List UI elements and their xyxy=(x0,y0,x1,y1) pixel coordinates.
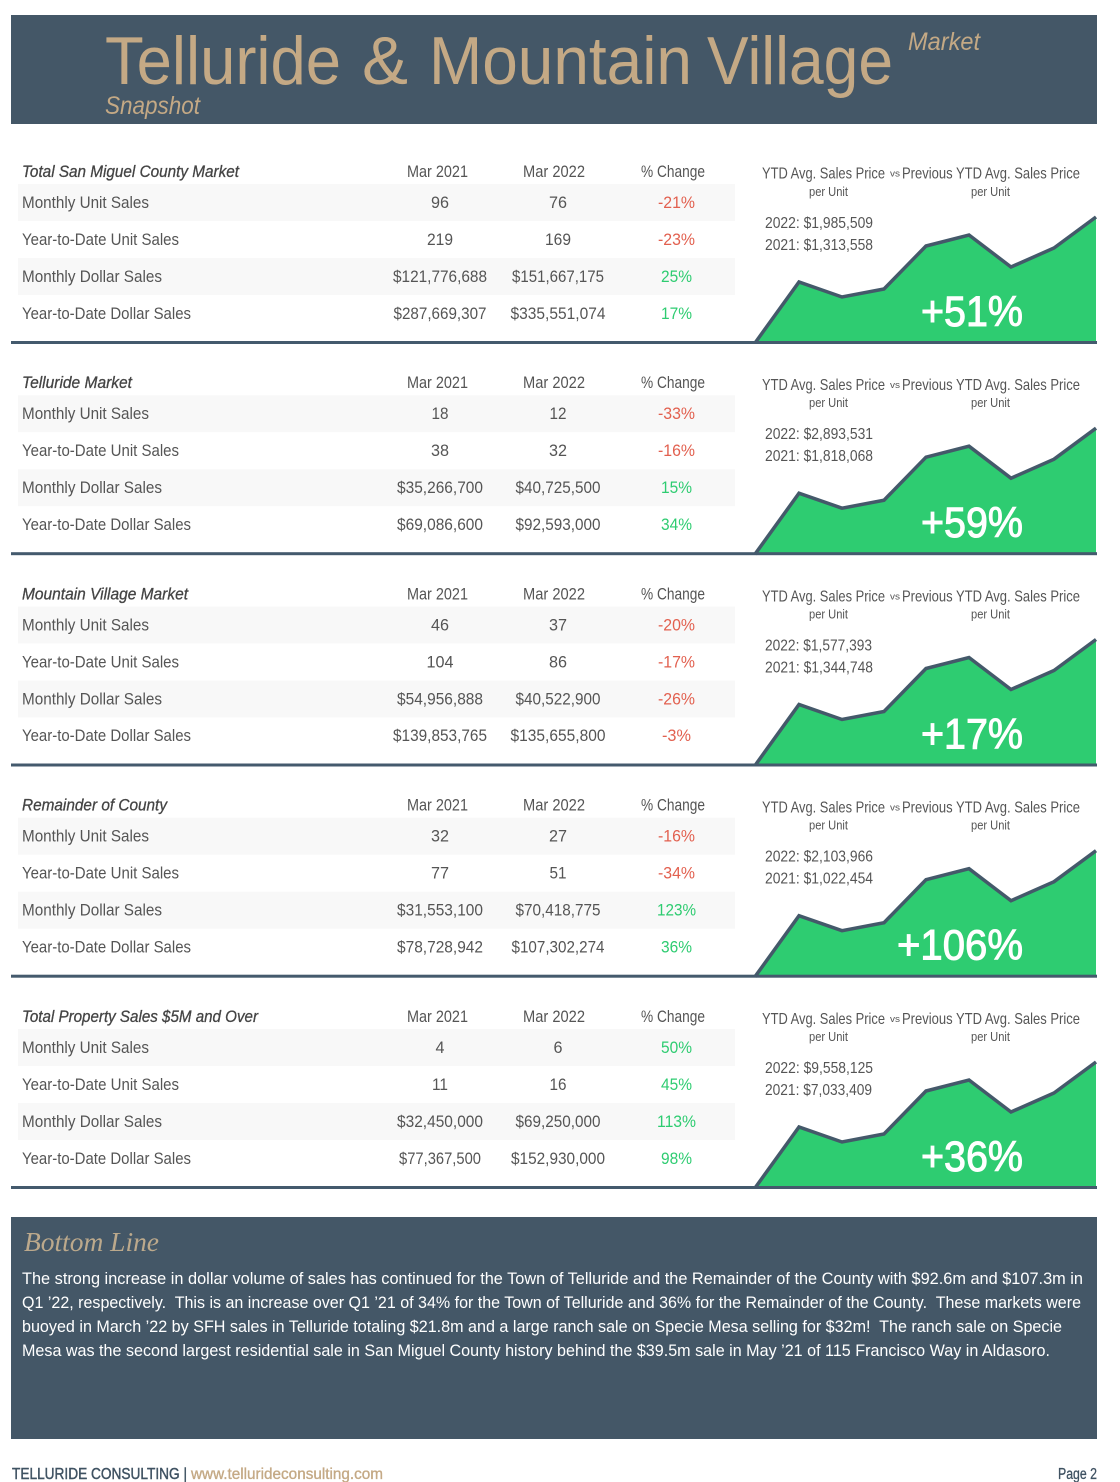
data table: Monthly Dollar Sales xyxy=(22,690,162,708)
panel: Bottom Line xyxy=(11,1217,1097,1439)
data table xyxy=(22,1007,705,1168)
data table: 16 xyxy=(550,1075,566,1094)
data table xyxy=(22,584,705,745)
data table: Mar 2022 xyxy=(523,796,585,815)
data table: Monthly Dollar Sales xyxy=(22,267,162,286)
data table: % Change xyxy=(641,373,705,392)
chart: YTD average sales price: 2022: $2,103,966 xyxy=(765,849,873,866)
data table: Year-to-Date Unit Sales xyxy=(22,652,179,672)
chart: YTD average sales price: vs xyxy=(890,592,901,602)
chart: YTD average sales price: per Unit xyxy=(809,1030,848,1044)
data table: 11 xyxy=(432,1075,448,1094)
chart: YTD average sales price: 2022: $9,558,125 xyxy=(765,1060,873,1077)
chart: YTD average sales price: per Unit xyxy=(809,185,848,199)
data table: % Change xyxy=(641,162,705,181)
data table: Mar 2022 xyxy=(523,162,585,181)
chart: YTD average sales price: +51% xyxy=(921,288,1023,336)
data table: 32 xyxy=(549,441,567,460)
panel: Total San Miguel County Market xyxy=(11,162,1097,344)
data table: % Change xyxy=(641,1007,705,1026)
data table: Year-to-Date Dollar Sales xyxy=(22,938,191,957)
body paragraph: The strong increase in dollar volume of sales has continued for the Town of Telluride and the Remainder of the County with $92.6m and $107.3m in xyxy=(22,1270,1083,1288)
chart: YTD average sales price xyxy=(11,377,1097,555)
data table: $121,776,688 xyxy=(393,267,487,286)
data table: Mar 2021 xyxy=(407,373,468,392)
data table: Mar 2021 xyxy=(407,162,468,181)
data table: 113% xyxy=(657,1112,696,1131)
data table: $92,593,000 xyxy=(516,515,600,534)
data table: 77 xyxy=(431,864,449,883)
chart: YTD average sales price: YTD Avg. Sales Price xyxy=(762,800,885,817)
data table: Monthly Unit Sales xyxy=(22,193,149,212)
data table: -17% xyxy=(658,652,695,672)
data table: -33% xyxy=(658,404,695,423)
chart: YTD average sales price: per Unit xyxy=(971,396,1010,410)
chart: YTD average sales price: per Unit xyxy=(971,608,1010,622)
data table xyxy=(22,162,705,323)
data table: $31,553,100 xyxy=(397,901,483,920)
data table: $40,522,900 xyxy=(516,690,600,708)
body paragraph xyxy=(22,1270,1083,1360)
data table: Monthly Dollar Sales xyxy=(22,901,162,920)
data table: $151,667,175 xyxy=(512,267,604,286)
title xyxy=(105,23,893,99)
data table: -20% xyxy=(658,616,695,634)
data table: Mar 2022 xyxy=(523,584,585,604)
data table: $40,725,500 xyxy=(516,478,600,497)
chart: YTD average sales price: per Unit xyxy=(971,1030,1010,1044)
data table: Year-to-Date Unit Sales xyxy=(22,1075,179,1094)
chart: YTD average sales price: 2021: $1,818,068 xyxy=(765,448,873,465)
data table: 96 xyxy=(431,193,449,212)
data table: Monthly Unit Sales xyxy=(22,404,149,423)
chart: YTD average sales price: vs xyxy=(890,380,901,390)
data table xyxy=(22,796,705,957)
Bottom Line heading: Bottom Line xyxy=(24,1227,159,1257)
data table: 50% xyxy=(661,1038,692,1057)
chart: YTD average sales price xyxy=(11,1011,1097,1189)
data table: $139,853,765 xyxy=(393,726,487,745)
data table: $135,655,800 xyxy=(510,726,606,745)
data table: -23% xyxy=(658,230,695,249)
chart: YTD average sales price: per Unit xyxy=(809,819,848,833)
data table: Mar 2022 xyxy=(523,373,585,392)
data table: Monthly Unit Sales xyxy=(22,616,149,634)
data table: $107,302,274 xyxy=(512,938,604,957)
header banner xyxy=(11,15,1097,124)
data table: 38 xyxy=(431,441,449,460)
data table: 219 xyxy=(427,230,453,249)
data table: 32 xyxy=(431,827,449,846)
data table: 27 xyxy=(549,827,567,846)
chart: YTD average sales price: YTD Avg. Sales Price xyxy=(762,166,885,182)
data table: Monthly Unit Sales xyxy=(22,1038,149,1057)
data table: -3% xyxy=(662,726,691,745)
chart: YTD average sales price: YTD Avg. Sales Price xyxy=(762,588,885,606)
data table: Year-to-Date Dollar Sales xyxy=(22,515,191,534)
panel: Mountain Village Market xyxy=(11,584,1097,766)
data table: 6 xyxy=(554,1038,562,1057)
data table: $69,086,600 xyxy=(397,515,483,534)
data table: Year-to-Date Dollar Sales xyxy=(22,726,191,745)
title: & xyxy=(362,23,408,99)
data table: Monthly Dollar Sales xyxy=(22,478,162,497)
data table: $54,956,888 xyxy=(397,690,483,708)
title: Telluride xyxy=(105,23,341,99)
chart: YTD average sales price: Previous YTD Avg. Sales Price xyxy=(902,588,1080,606)
chart: YTD average sales price xyxy=(11,588,1097,766)
data table: Year-to-Date Unit Sales xyxy=(22,230,179,249)
chart: YTD average sales price xyxy=(11,166,1097,344)
title: Village xyxy=(707,23,893,99)
body paragraph: Q1 ’22, respectively. This is an increase over Q1 ’21 of 34% for the Town of Telluride and 36% for the Remainder of the County. These markets were xyxy=(22,1294,1081,1312)
data table: 98% xyxy=(661,1149,692,1168)
data table: 51 xyxy=(550,864,566,883)
chart: YTD average sales price: Previous YTD Avg. Sales Price xyxy=(902,800,1080,817)
chart: YTD average sales price: 2022: $1,985,509 xyxy=(765,215,873,232)
data table: Mar 2021 xyxy=(407,796,468,815)
data table: $78,728,942 xyxy=(397,938,483,957)
data table: 36% xyxy=(661,938,692,957)
data table: 4 xyxy=(436,1038,444,1057)
data table: -34% xyxy=(658,864,695,883)
chart: YTD average sales price: vs xyxy=(890,1014,901,1024)
body paragraph: Mesa was the second largest residential sale in San Miguel County history behind the $39.5m sale in May ’21 of 115 Francisco Way in Aldasoro. xyxy=(22,1342,1050,1360)
data table: Mar 2021 xyxy=(407,1007,468,1026)
chart: YTD average sales price: 2021: $1,344,748 xyxy=(765,660,873,676)
data table: 34% xyxy=(661,515,692,534)
data table: % Change xyxy=(641,584,705,604)
chart: YTD average sales price: +17% xyxy=(921,710,1023,758)
data table: Year-to-Date Unit Sales xyxy=(22,864,179,883)
data table: $70,418,775 xyxy=(516,901,600,920)
chart: YTD average sales price: per Unit xyxy=(971,819,1010,833)
chart: YTD average sales price: per Unit xyxy=(809,608,848,622)
data table: $152,930,000 xyxy=(511,1149,605,1168)
section heading: Total San Miguel County Market xyxy=(22,162,240,181)
chart: YTD average sales price: 2021: $7,033,409 xyxy=(765,1082,872,1099)
data table: 17% xyxy=(661,304,692,323)
data table: $35,266,700 xyxy=(397,478,483,497)
data table: $335,551,074 xyxy=(510,304,606,323)
data table: 12 xyxy=(550,404,566,423)
section heading: Telluride Market xyxy=(22,373,133,392)
data table: % Change xyxy=(641,796,705,815)
chart: YTD average sales price: 2021: $1,022,454 xyxy=(765,871,873,888)
data table: Year-to-Date Dollar Sales xyxy=(22,1149,191,1168)
data table: 18 xyxy=(432,404,448,423)
data table: 104 xyxy=(426,652,454,672)
data table: 76 xyxy=(549,193,567,212)
data table: 15% xyxy=(661,478,692,497)
data table: 46 xyxy=(431,616,449,634)
data table: -26% xyxy=(658,690,695,708)
data table: Mar 2022 xyxy=(523,1007,585,1026)
panel: Total Property Sales $5M and Over xyxy=(11,1007,1097,1189)
data table: -16% xyxy=(658,441,695,460)
data table: Year-to-Date Dollar Sales xyxy=(22,304,191,323)
data table: 25% xyxy=(661,267,692,286)
data table: Monthly Dollar Sales xyxy=(22,1112,162,1131)
subtitle: Snapshot: Snapshot xyxy=(105,92,201,120)
data table: 45% xyxy=(661,1075,692,1094)
data table xyxy=(22,373,705,534)
data table: 169 xyxy=(545,230,571,249)
data table: $77,367,500 xyxy=(399,1149,481,1168)
panel: Telluride Market xyxy=(11,373,1097,555)
data table: -21% xyxy=(658,193,695,212)
title suffix: Market: Market xyxy=(908,28,981,56)
data table: 123% xyxy=(657,901,696,920)
data table: $287,669,307 xyxy=(394,304,486,323)
data table: 37 xyxy=(549,616,567,634)
chart: YTD average sales price: +36% xyxy=(921,1133,1023,1181)
data table: Mar 2021 xyxy=(407,584,468,604)
chart: YTD average sales price: Previous YTD Avg. Sales Price xyxy=(902,1011,1080,1028)
chart: YTD average sales price: 2022: $1,577,393 xyxy=(765,638,872,654)
chart: YTD average sales price: vs xyxy=(890,168,901,178)
chart: YTD average sales price: YTD Avg. Sales Price xyxy=(762,377,885,394)
chart: YTD average sales price: per Unit xyxy=(809,396,848,410)
chart: YTD average sales price: +59% xyxy=(921,499,1023,547)
data table: -16% xyxy=(658,827,695,846)
body paragraph: buoyed in March ’22 by SFH sales in Telluride totaling $21.8m and a large ranch sale on Specie Mesa selling for $32m! The ranch sale on Specie xyxy=(22,1318,1062,1336)
panel: Remainder of County xyxy=(11,796,1097,978)
chart: YTD average sales price: 2021: $1,313,558 xyxy=(765,237,873,254)
data table: Monthly Unit Sales xyxy=(22,827,149,846)
section heading: Total Property Sales $5M and Over xyxy=(22,1007,259,1026)
data table: 86 xyxy=(549,652,567,672)
data table: $69,250,000 xyxy=(516,1112,600,1131)
chart: YTD average sales price: YTD Avg. Sales Price xyxy=(762,1011,885,1028)
section heading: Mountain Village Market xyxy=(22,584,189,604)
chart: YTD average sales price xyxy=(11,800,1097,978)
title: Mountain xyxy=(429,23,692,99)
chart: YTD average sales price: Previous YTD Avg. Sales Price xyxy=(902,377,1080,394)
data table: $32,450,000 xyxy=(397,1112,483,1131)
chart: YTD average sales price: Previous YTD Avg. Sales Price xyxy=(902,166,1080,182)
section heading: Remainder of County xyxy=(22,796,168,815)
chart: YTD average sales price: +106% xyxy=(897,922,1023,970)
chart: YTD average sales price: vs xyxy=(890,803,901,813)
data table: Year-to-Date Unit Sales xyxy=(22,441,179,460)
chart: YTD average sales price: 2022: $2,893,531 xyxy=(765,426,873,443)
chart: YTD average sales price: per Unit xyxy=(971,185,1010,199)
